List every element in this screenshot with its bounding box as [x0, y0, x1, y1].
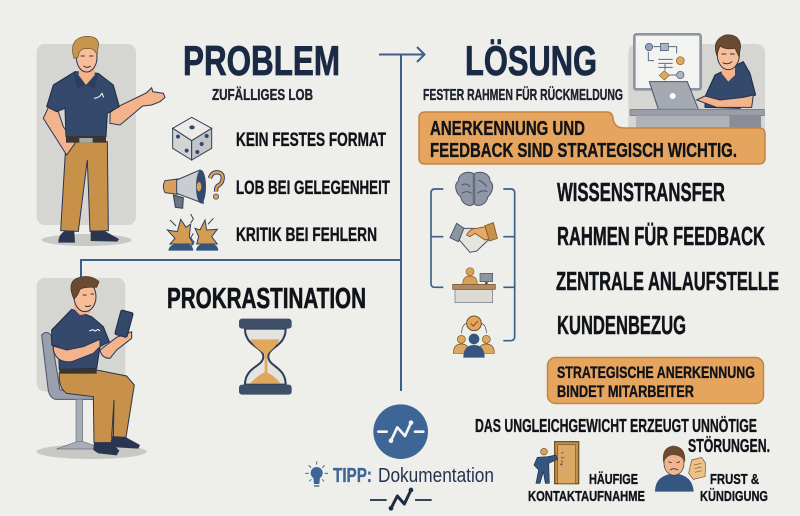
icon: central logo circle [373, 404, 428, 459]
icon: reception desk [453, 268, 495, 303]
icon: megaphone with question mark [163, 170, 223, 208]
panel: seated figure with phone [37, 276, 147, 459]
icon: team with checkmark [453, 316, 494, 358]
text: Lob bei Gelegenheit: LOB BEI GELEGENHEIT [236, 178, 390, 199]
text: Frust und Kündigung: FRUST & [710, 471, 759, 488]
icon: bottom logo mark [370, 488, 432, 511]
icon: frustrated person with paper [655, 446, 706, 492]
text: Frust und Kündigung [700, 471, 768, 505]
heading: Prokrastination: PROKRASTINATION [167, 283, 366, 315]
connector lines and arrow [81, 47, 424, 391]
text: häufige Kontaktaufnahme: KONTAKTAUFNAHME [528, 488, 645, 505]
icon: brain [456, 172, 493, 205]
tip text: Dokumentation: Dokumentation [378, 465, 494, 487]
icon: handshake [450, 223, 497, 252]
text: häufige Kontaktaufnahme: HÄUFIGE [589, 471, 638, 488]
panel: presenter at desk [628, 34, 765, 130]
text: imbalance statement [475, 416, 770, 456]
callout: retention [548, 358, 764, 404]
callout: strategic importance [419, 112, 765, 164]
heading: Lösung: LÖSUNG [465, 37, 597, 84]
icon: clashing conflict [167, 214, 218, 251]
icon: dice [173, 117, 212, 160]
icon: person knocking on door [534, 442, 579, 484]
callout: retention: BINDET MITARBEITER [557, 382, 694, 401]
panel: problem figure [37, 36, 165, 246]
subheading: zufälliges Lob: ZUFÄLLIGES LOB [212, 86, 313, 104]
text: kein festes Format: KEIN FESTES FORMAT [236, 130, 386, 151]
heading: problem: PROBLEM [183, 37, 340, 84]
tip label: TIPP: [333, 465, 372, 487]
subheading: fester Rahmen: FESTER RAHMEN FÜR RÜCKMELDUNG [423, 85, 623, 104]
callout: strategic importance: ANERKENNUNG UND [430, 118, 585, 140]
text: Kundenbezug: KUNDENBEZUG [557, 310, 686, 340]
icon: hourglass [239, 319, 292, 395]
icon: light bulb [305, 461, 328, 486]
text: Frust und Kündigung: KÜNDIGUNG [700, 488, 768, 505]
text: häufige Kontaktaufnahme [528, 471, 645, 505]
brackets linking solution icons [431, 189, 515, 341]
text: Kritik bei Fehlern: KRITIK BEI FEHLERN [236, 225, 377, 246]
